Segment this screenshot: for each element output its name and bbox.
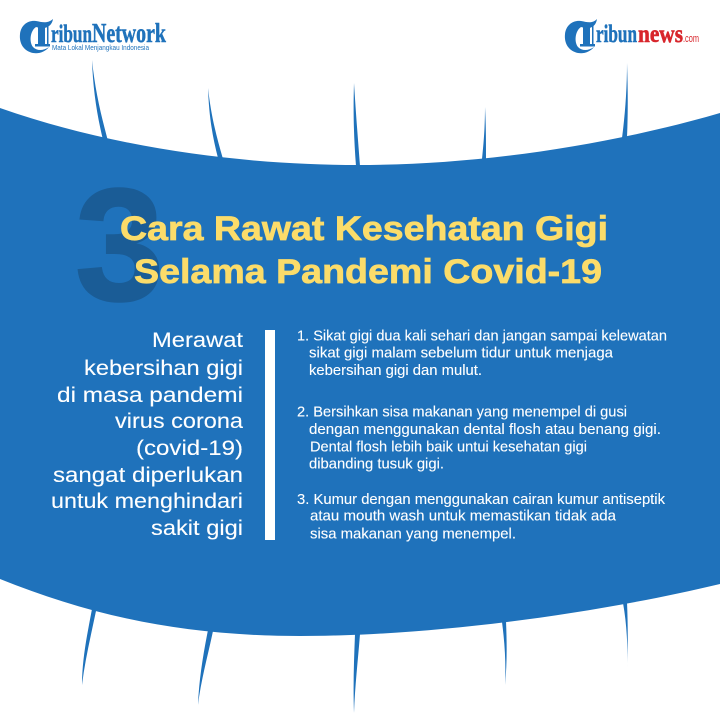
tip 3 xyxy=(297,492,666,542)
tips list xyxy=(297,328,667,542)
big numeral 3: 3 xyxy=(75,155,164,334)
tip 2: dengan menggunakan dental flosh atau benang gigi. xyxy=(309,422,661,438)
lead text: untuk menghindari xyxy=(51,490,243,513)
title: Cara Rawat Kesehatan Gigi xyxy=(120,210,608,248)
tip 2: dibanding tusuk gigi. xyxy=(309,456,444,472)
blue curved panel xyxy=(0,108,720,636)
logo: Tribun Network xyxy=(20,18,166,53)
tip 1: kebersihan gigi dan mulut. xyxy=(309,363,482,379)
tip 2 xyxy=(297,404,661,472)
lead text xyxy=(51,329,243,540)
tip 1: sikat gigi malam sebelum tidur untuk menjaga xyxy=(309,346,614,362)
vertical white bar xyxy=(265,330,275,540)
lead text: di masa pandemi xyxy=(57,384,243,407)
lead text: (covid-19) xyxy=(136,437,243,460)
wordmark: .com: .com xyxy=(683,33,699,45)
lead text: virus corona xyxy=(115,410,243,433)
tip 3: atau mouth wash untuk memastikan tidak ada xyxy=(310,508,617,524)
tip 2: 2. Bersihkan sisa makanan yang menempel di gusi xyxy=(297,404,627,420)
title xyxy=(120,210,608,291)
top spikes xyxy=(92,60,628,166)
icon: Tribun T emblem xyxy=(20,19,53,53)
title: Selama Pandemi Covid-19 xyxy=(134,253,602,291)
icon: Tribun T emblem xyxy=(565,19,597,53)
lead text: Merawat xyxy=(152,329,243,352)
lead text: sakit gigi xyxy=(151,517,243,540)
lead text: kebersihan gigi xyxy=(84,357,243,380)
tip 1: 1. Sikat gigi dua kali sehari dan jangan sampai kelewatan xyxy=(297,328,667,344)
tip 3: sisa makanan yang menempel. xyxy=(310,526,516,542)
logo: Tribunnews.com xyxy=(565,19,699,53)
bottom spikes xyxy=(82,602,628,713)
tip 3: 3. Kumur dengan menggunakan cairan kumur antiseptik xyxy=(297,492,666,508)
tip 2: Dental flosh lebih baik untui kesehatan gigi xyxy=(310,440,587,456)
tip 1 xyxy=(297,328,667,379)
lead text: sangat diperlukan xyxy=(53,464,243,487)
wordmark: ribun: ribun xyxy=(51,21,92,48)
wordmark: ribun: ribun xyxy=(596,21,637,48)
tagline: Mata Lokal Menjangkau Indonesia xyxy=(52,43,150,52)
wordmark: Network: Network xyxy=(92,18,166,48)
wordmark: news: news xyxy=(638,21,683,48)
